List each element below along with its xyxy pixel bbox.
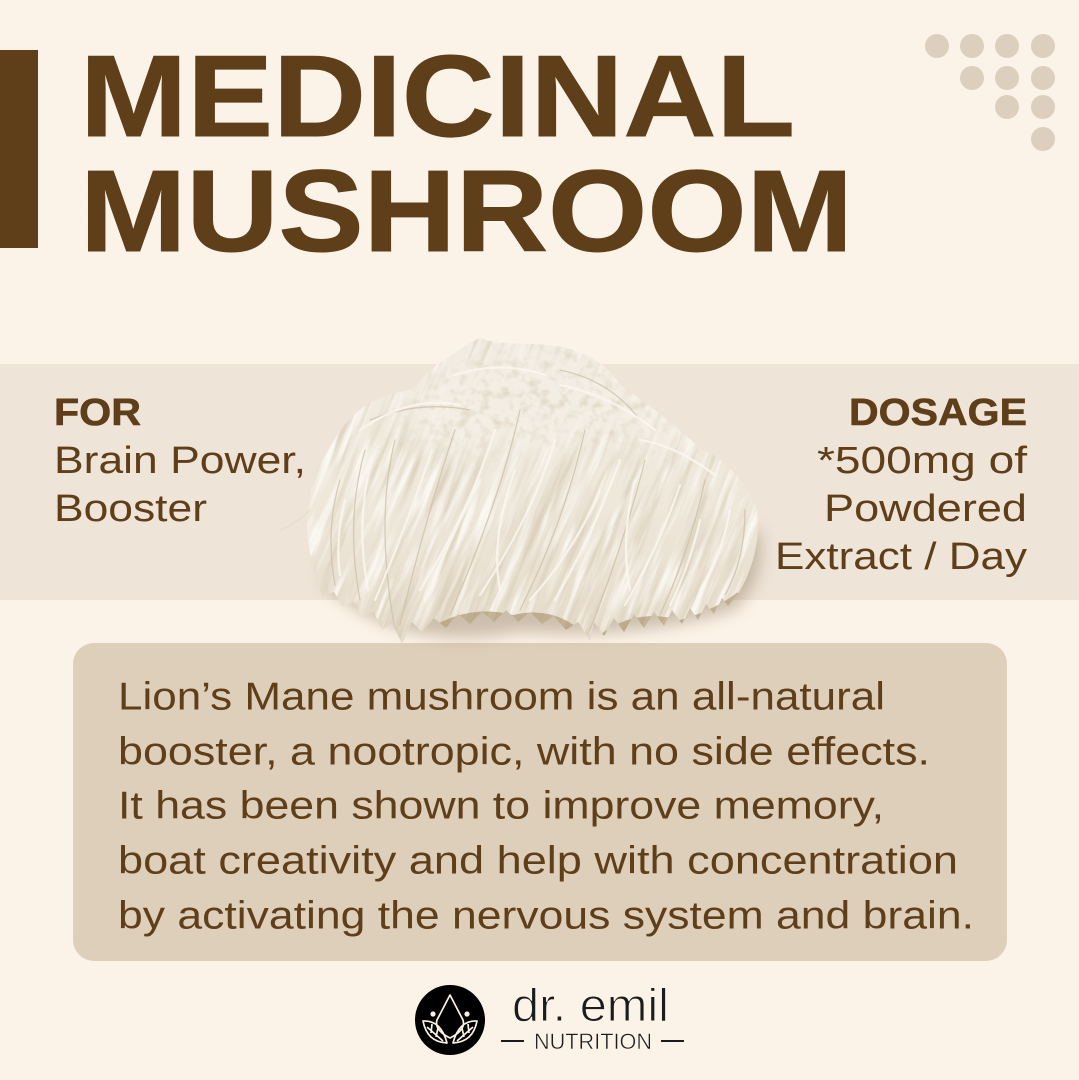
description card <box>73 643 1007 961</box>
base shading <box>440 592 738 640</box>
panel: dosage: DOSAGE <box>849 392 1027 434</box>
panel: dosage: Extract / Day <box>775 536 1027 578</box>
illustration: lion's mane mushroom <box>307 338 768 644</box>
panel: for: FOR <box>54 392 141 434</box>
panel: dosage <box>775 392 1028 578</box>
title: MEDICINAL <box>80 31 795 161</box>
description card: Lion’s Mane mushroom is an all-natural <box>118 676 885 718</box>
description card: It has been shown to improve memory, <box>118 784 884 828</box>
wordmark: NUTRITION <box>534 1029 652 1054</box>
highlight strands <box>338 368 730 605</box>
panel: dosage: *500mg of <box>817 440 1028 482</box>
shadow strands <box>331 370 745 630</box>
description card: boat creativity and help with concentration <box>118 840 958 882</box>
stray hair <box>280 510 310 530</box>
wordmark: dr. emil <box>512 979 669 1031</box>
description card: by activating the nervous system and brain. <box>118 894 974 938</box>
accent bar <box>0 50 38 248</box>
icon: lotus emblem <box>415 985 485 1055</box>
panel: dosage: Powdered <box>824 488 1027 530</box>
wordmark <box>501 979 684 1054</box>
info band <box>0 364 1079 600</box>
panel: for <box>54 392 306 530</box>
fibre texture <box>307 339 758 644</box>
description card: booster, a nootropic, with no side effects. <box>118 730 930 774</box>
curly top texture <box>399 345 666 451</box>
title: MUSHROOM <box>80 146 853 276</box>
title <box>80 31 853 276</box>
logo: dr. emil nutrition <box>415 979 684 1055</box>
panel: for: Booster <box>54 488 207 530</box>
decorative dot grid <box>925 34 1055 151</box>
panel: for: Brain Power, <box>54 440 306 482</box>
